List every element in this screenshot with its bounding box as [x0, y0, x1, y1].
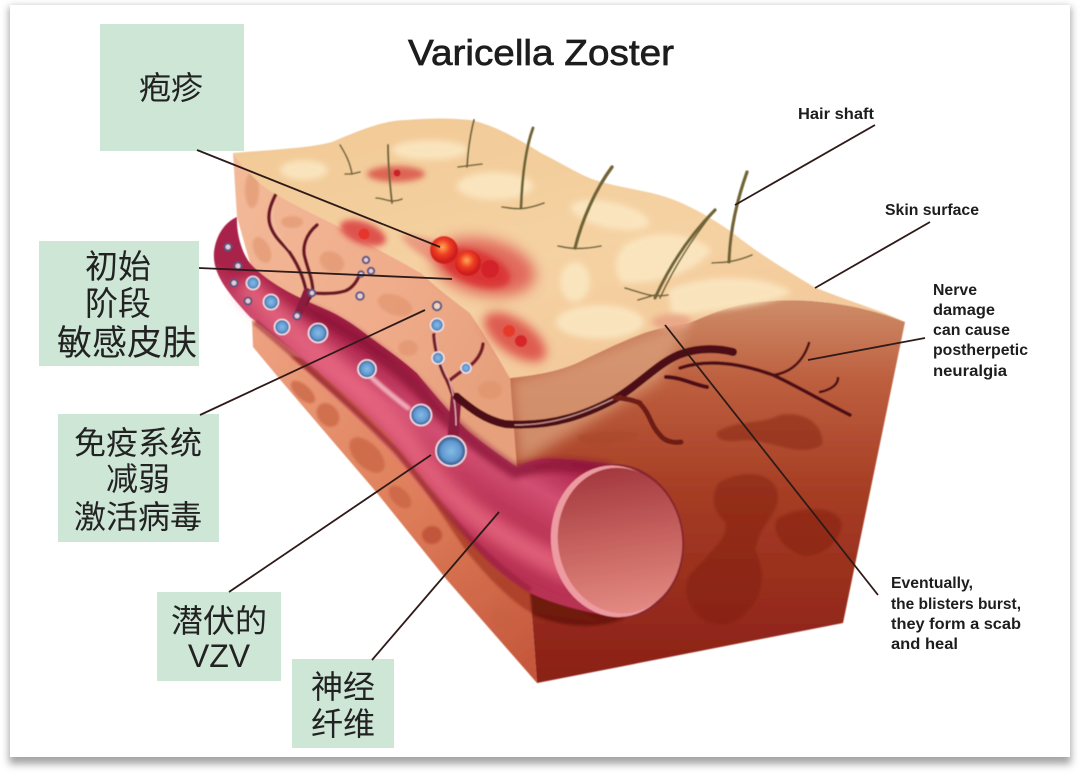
virus particles [246, 276, 471, 466]
label: 神经纤维: 神经 [311, 669, 375, 705]
annotation: eventually [891, 575, 1021, 653]
label: 潜伏的VZV: 潜伏的 [171, 603, 267, 639]
right face of skin block [510, 300, 905, 683]
blisters and lesions [337, 166, 554, 372]
label: 潜伏的VZV [157, 592, 281, 681]
label: 初始阶段敏感皮肤: 敏感皮肤 [57, 324, 197, 363]
skin nerve branches [457, 343, 850, 442]
left dermis face [233, 153, 517, 467]
label: 疱疹 [100, 24, 244, 151]
tube opening [541, 455, 694, 626]
scab mark near surface edge [652, 314, 692, 330]
label: 初始阶段敏感皮肤: 阶段 [85, 285, 151, 322]
upper dark band of tube [300, 308, 610, 472]
annotation: eventually: they form a scab [891, 616, 1021, 633]
label: 初始阶段敏感皮肤 [39, 241, 199, 366]
annotation: nerve damage: damage [933, 302, 995, 319]
small hollow virus rings [224, 244, 441, 320]
annotation: eventually: Eventually, [891, 575, 973, 592]
dermis patches [245, 172, 502, 399]
annotation: hair shaft: Hair shaft [798, 106, 874, 123]
branches into left dermis [269, 192, 483, 438]
annotation: nerve damage: neuralgia [933, 363, 1007, 380]
label: 初始阶段敏感皮肤: 初始 [85, 248, 151, 285]
label: 神经纤维 [292, 659, 394, 748]
annotation: nerve damage [933, 282, 1028, 380]
dark lining under tube [290, 356, 600, 622]
lower tissue cells [287, 377, 512, 626]
upper lighter dermis band [510, 323, 689, 467]
label: 免疫系统减弱激活病毒: 减弱 [106, 461, 170, 497]
label: 免疫系统减弱激活病毒 [58, 414, 219, 542]
label: 神经纤维: 纤维 [311, 706, 375, 742]
label: 免疫系统减弱激活病毒: 免疫系统 [74, 425, 202, 461]
tissue blotches [686, 414, 842, 625]
tube lower shade [255, 322, 530, 590]
left lower tissue face [252, 320, 537, 683]
top skin surface [233, 118, 905, 378]
label: 潜伏的VZV: VZV [188, 638, 251, 674]
nerve fiber tube [214, 217, 694, 626]
label: 免疫系统减弱激活病毒: 激活病毒 [74, 499, 202, 535]
leader lines [197, 125, 930, 660]
tube highlight [250, 290, 570, 570]
annotation: nerve damage: can cause [933, 322, 1010, 339]
annotation: nerve damage: Nerve [933, 282, 977, 299]
annotation: skin surface: Skin surface [885, 202, 979, 219]
skin cross-section illustration [214, 118, 905, 683]
pale skin patches [280, 140, 792, 339]
annotation: nerve damage: postherpetic [933, 342, 1028, 359]
shadow under tube [530, 590, 625, 626]
annotation: eventually: and heal [891, 636, 958, 653]
label: 疱疹: 疱疹 [139, 70, 203, 106]
title: Varicella Zoster [408, 32, 674, 73]
hairs [340, 120, 752, 300]
annotation: eventually: the blisters burst, [891, 596, 1021, 613]
